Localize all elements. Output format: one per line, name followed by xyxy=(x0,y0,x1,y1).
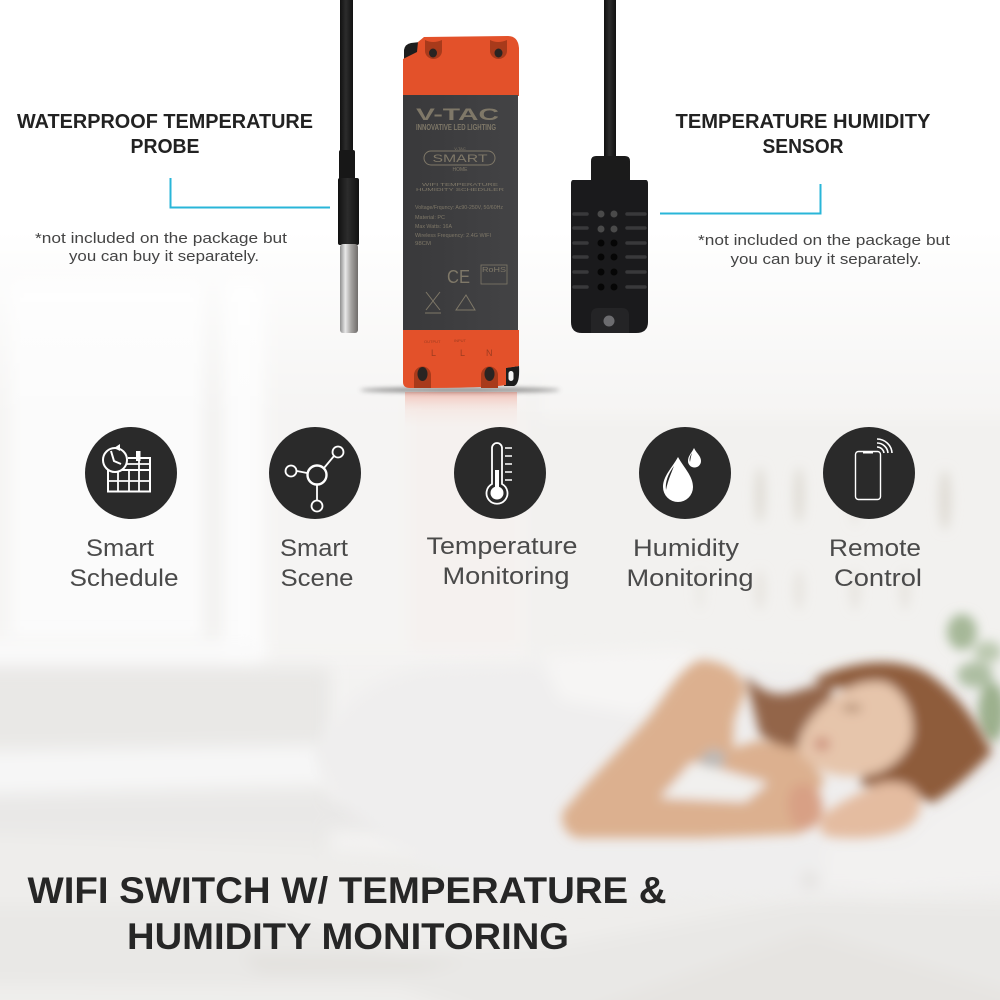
printed label: CE xyxy=(447,267,470,287)
feature: humidity monitoring xyxy=(639,427,731,519)
probe note: *not included on the package but xyxy=(35,230,288,247)
temperature humidity sensor heading xyxy=(676,111,931,158)
vent slots xyxy=(574,214,645,287)
terminal labels: L xyxy=(431,348,436,358)
label: smart scene: Smart xyxy=(280,535,348,562)
label: humidity monitoring: Humidity xyxy=(633,535,739,562)
waterproof temperature probe heading xyxy=(17,111,313,158)
printed label: SMART xyxy=(432,153,488,165)
device shadow xyxy=(360,388,560,392)
feature: remote control xyxy=(823,427,915,519)
printed label: HUMIDITY SCHEDULER xyxy=(416,187,505,192)
blanket xyxy=(318,650,1000,900)
printed label: Wireless Frequency: 2.4G WIFI xyxy=(415,233,491,239)
label: humidity monitoring: Monitoring xyxy=(626,565,754,592)
label: temperature monitoring: Temperature xyxy=(426,533,578,560)
label: smart schedule xyxy=(70,535,178,592)
label: smart scene: Scene xyxy=(280,565,354,592)
probe note xyxy=(35,230,288,265)
label: remote control xyxy=(829,535,922,592)
woman xyxy=(562,660,992,838)
printed label: Voltage/Frquncy: Ac90-250V, 50/60Hz xyxy=(415,205,504,211)
label: remote control: Remote xyxy=(829,535,921,562)
label: temperature monitoring xyxy=(426,533,578,590)
waterproof temperature probe heading: PROBE xyxy=(130,136,200,158)
main title: WIFI SWITCH W/ TEMPERATURE & xyxy=(28,870,666,911)
label: humidity monitoring xyxy=(626,535,754,592)
hair xyxy=(812,662,992,803)
smart switch device xyxy=(403,36,519,388)
terminal labels: INPUT xyxy=(454,338,467,343)
plant xyxy=(947,614,1000,742)
printed label: HOME xyxy=(452,167,468,173)
printed label: 98CM xyxy=(415,241,431,247)
printed label: Material: PC xyxy=(415,215,445,221)
terminal labels: N xyxy=(486,348,492,358)
sensor note: *not included on the package but xyxy=(698,232,951,249)
mounting lugs xyxy=(404,42,420,60)
printed label: Max Watts: 16A xyxy=(415,224,453,230)
feature: smart scene xyxy=(269,427,361,519)
grey body xyxy=(403,95,518,330)
terminal labels: L xyxy=(460,348,465,358)
lips and eye xyxy=(814,737,830,751)
sensor note xyxy=(698,232,951,268)
printed label: V-TAC xyxy=(416,105,499,124)
temperature humidity sensor heading: TEMPERATURE HUMIDITY xyxy=(676,111,931,133)
headboard stripes xyxy=(696,467,951,610)
printed label xyxy=(415,105,507,313)
bed and sheets xyxy=(0,640,1000,1000)
label: temperature monitoring: Monitoring xyxy=(442,563,570,590)
lower arm xyxy=(820,782,921,838)
label: smart schedule: Schedule xyxy=(70,565,178,592)
terminal labels: OUTPUT xyxy=(424,339,441,344)
window and wall xyxy=(0,280,1000,680)
main title: HUMIDITY MONITORING xyxy=(127,916,569,957)
white fade over upper background xyxy=(0,0,1000,420)
temperature probe xyxy=(338,0,359,333)
callout line: sensor xyxy=(660,184,820,214)
vent holes xyxy=(598,210,618,290)
printed label: INNOVATIVE LED LIGHTING xyxy=(416,123,496,132)
printed label: WIFI TEMPERATURE xyxy=(422,182,498,187)
feature: temperature monitoring xyxy=(454,427,546,519)
terminal labels xyxy=(424,338,492,358)
printed label: V-TAC xyxy=(454,146,466,151)
label: remote control: Control xyxy=(834,565,922,592)
temperature humidity sensor heading: SENSOR xyxy=(762,136,844,158)
face xyxy=(798,681,913,776)
label: smart schedule: Smart xyxy=(86,535,154,562)
device reflection xyxy=(405,392,517,428)
printed label: RoHS xyxy=(482,265,506,274)
main title xyxy=(28,870,666,957)
hand xyxy=(788,784,823,830)
feature: smart schedule xyxy=(85,427,177,519)
gap inside arm xyxy=(660,762,768,802)
arm and torso xyxy=(562,660,825,838)
probe note: you can buy it separately. xyxy=(69,248,259,265)
orange end caps xyxy=(403,36,519,96)
waterproof temperature probe heading: WATERPROOF TEMPERATURE xyxy=(17,111,313,133)
sensor note: you can buy it separately. xyxy=(730,251,922,268)
screw slots xyxy=(414,40,507,388)
mounting tab xyxy=(591,308,629,333)
humidity sensor xyxy=(571,0,648,333)
label: smart scene xyxy=(280,535,354,592)
callout line: probe xyxy=(170,178,330,208)
